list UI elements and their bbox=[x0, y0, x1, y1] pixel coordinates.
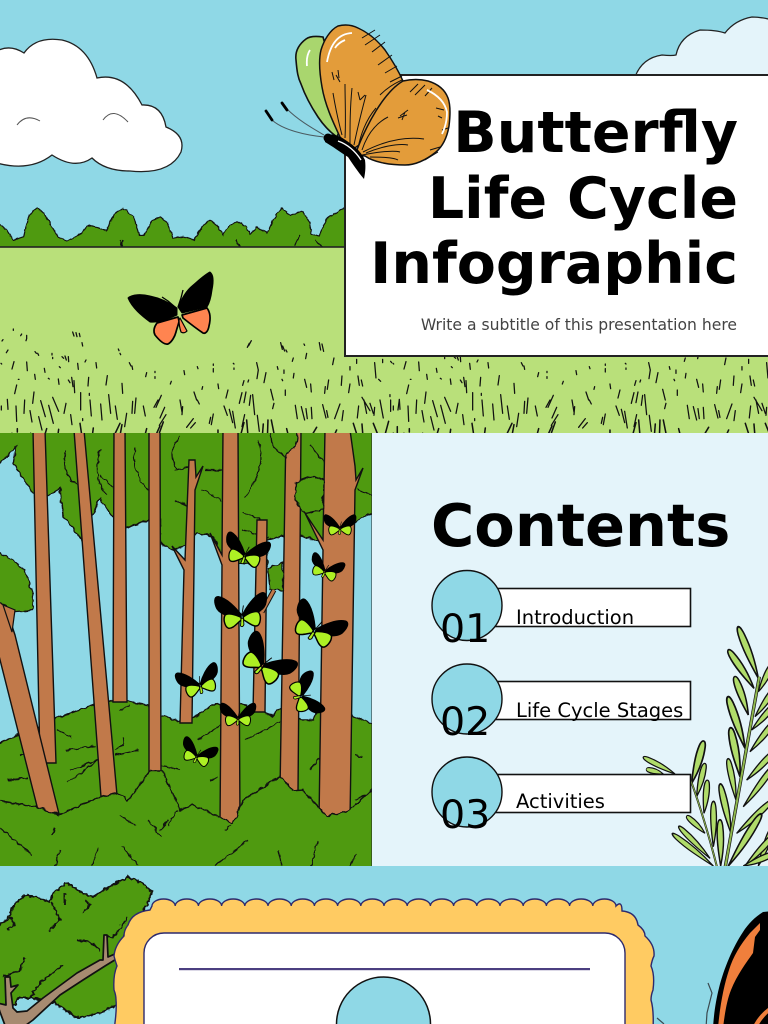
contents item 03 bbox=[432, 757, 690, 838]
title: Life Cycle bbox=[428, 166, 738, 232]
canopy inner lines bbox=[64, 436, 372, 538]
icon: orange butterfly bbox=[266, 25, 450, 179]
front bush lines bbox=[0, 795, 365, 870]
contents item 02: Life Cycle Stages bbox=[516, 699, 683, 722]
forest canopy bbox=[0, 425, 380, 566]
scalloped frame bbox=[114, 899, 654, 1024]
meadow bbox=[0, 247, 768, 437]
title card bbox=[345, 75, 768, 356]
icon: butterfly wing bbox=[657, 911, 768, 1024]
panel: next slide preview bbox=[0, 866, 768, 1024]
forest panel edge bbox=[372, 433, 373, 866]
contents item 02 bbox=[432, 664, 690, 745]
contents item 01: 01 bbox=[440, 606, 490, 652]
panel: title slide bbox=[0, 0, 768, 455]
title: Infographic bbox=[370, 231, 738, 297]
panel: forest illustration bbox=[0, 425, 380, 875]
title: Butterfly bbox=[453, 100, 738, 166]
icon group: green butterflies bbox=[175, 515, 356, 769]
icon: black and orange butterfly bbox=[128, 272, 213, 344]
front bushes bbox=[0, 770, 372, 826]
middle bushes bbox=[0, 700, 372, 816]
divider line bbox=[179, 968, 590, 970]
tree line bbox=[0, 208, 350, 250]
tree trunks bbox=[0, 430, 363, 825]
cloud: right pale bbox=[635, 17, 768, 80]
tree bbox=[0, 877, 152, 1024]
bush lines bbox=[8, 705, 362, 782]
grass marks bbox=[0, 328, 768, 433]
contents item 01: Introduction bbox=[516, 606, 634, 629]
contents item 03: 03 bbox=[440, 792, 490, 838]
contents item 01 bbox=[432, 570, 690, 652]
white card bbox=[144, 933, 625, 1024]
contents item 03: Activities bbox=[516, 790, 605, 813]
foreground leaf clumps bbox=[0, 428, 324, 632]
circle: stage badge bbox=[336, 977, 430, 1024]
subtitle: Write a subtitle of this presentation here bbox=[421, 316, 737, 334]
cloud: left white bbox=[0, 39, 182, 172]
heading: Contents: Contents bbox=[431, 491, 730, 560]
plant: rosemary sprig bbox=[642, 625, 768, 868]
panel: contents bbox=[372, 433, 768, 868]
contents item 02: 02 bbox=[440, 699, 490, 745]
